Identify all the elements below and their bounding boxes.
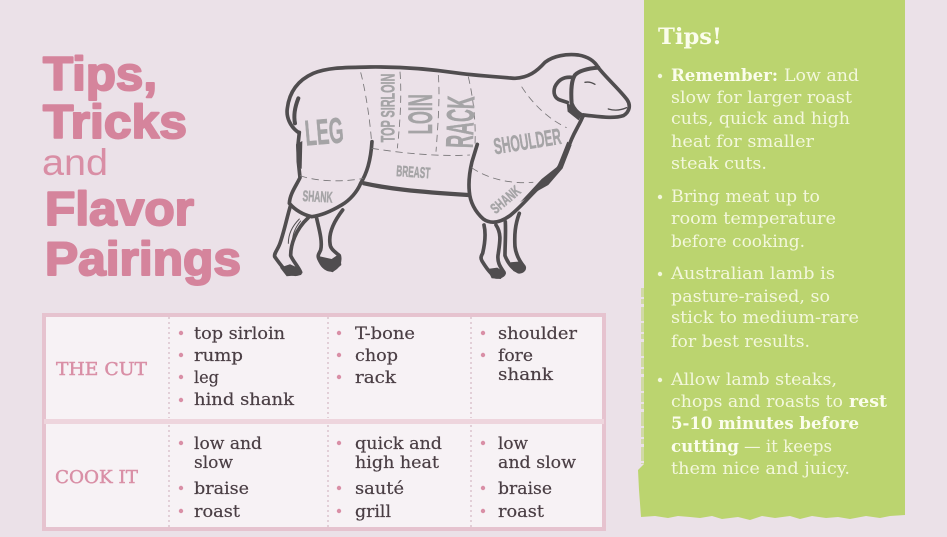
row: the cut: rack (355, 368, 397, 387)
cut divider lines (300, 72, 567, 183)
cut labels: SHOULDER (492, 123, 563, 159)
title (42, 47, 241, 285)
row: the cut: THE CUT (56, 359, 147, 380)
tip: remember: slow for larger roast (671, 88, 852, 107)
cut labels: BREAST (396, 163, 431, 182)
row: the cut (56, 324, 577, 409)
tip: pasture-raised: stick to medium-rare (671, 308, 859, 327)
sheep outline (275, 55, 629, 277)
tip: room temperature: before cooking. (671, 232, 805, 251)
row: cook it: and slow (498, 453, 576, 472)
tip: pasture-raised: for best results. (671, 332, 810, 351)
tip: pasture-raised: pasture-raised, so (671, 287, 830, 306)
sheep diagram (275, 55, 629, 279)
ragged left edge (641, 288, 644, 464)
title: Tricks (43, 95, 187, 148)
row: cook it: braise (498, 479, 552, 498)
row: cook it: quick and (355, 434, 442, 453)
tip: resting: them nice and juicy. (671, 459, 850, 478)
tip: remember: heat for smaller (671, 132, 814, 151)
green panel background (638, 0, 905, 520)
tip: room temperature: room temperature (671, 209, 836, 228)
row: the cut: hind shank (194, 390, 295, 409)
row: the cut: T-bone (355, 324, 415, 343)
row: cook it: COOK IT (55, 467, 138, 488)
row: the cut: chop (355, 346, 398, 365)
row: cook it: slow (194, 453, 233, 472)
tip: room temperature (658, 187, 836, 251)
row: cook it: sauté (355, 479, 404, 498)
tip: room temperature: Bring meat up to (671, 187, 820, 206)
dark shadow shapes (280, 102, 583, 279)
cut labels: SHANK (488, 183, 524, 217)
table (44, 315, 604, 529)
panel: tips (638, 0, 905, 520)
tip: resting: — it keeps (744, 437, 832, 456)
title: Flavor (45, 182, 194, 235)
cut labels: LOIN (402, 94, 440, 134)
row: the cut: top sirloin (194, 324, 285, 343)
tip: resting: cutting (671, 437, 739, 456)
row: cook it: roast (498, 502, 544, 521)
row: the cut: shank (498, 365, 554, 384)
row: cook it: low and (194, 434, 262, 453)
row: the cut: leg (194, 368, 219, 387)
title: Pairings (45, 232, 241, 285)
cut labels (302, 74, 563, 217)
row: the cut: rump (194, 346, 243, 365)
tip: pasture-raised (658, 264, 859, 351)
tip: remember: cuts, quick and high (671, 109, 850, 128)
tip: remember: Low and (784, 66, 859, 85)
row: the cut: shoulder (498, 324, 577, 343)
row: cook it: braise (194, 479, 249, 498)
row: cook it: high heat (355, 453, 439, 472)
tip: resting: Allow lamb steaks, (670, 370, 837, 389)
tip: resting: 5-10 minutes before (671, 414, 859, 433)
cut labels: SHANK (302, 188, 333, 207)
row: the cut: fore (498, 346, 533, 365)
title: Tips, (43, 47, 157, 100)
tip: remember: steak cuts. (671, 154, 767, 173)
row: cook it: roast (194, 502, 240, 521)
tip: remember (658, 66, 859, 173)
cut labels: LEG (303, 109, 345, 154)
tip: remember: Remember: (671, 66, 778, 85)
cut labels: RACK (439, 95, 483, 149)
tip: resting (658, 370, 887, 478)
tip: resting: chops and roasts to (671, 392, 843, 411)
row: cook it (55, 434, 576, 521)
tip: pasture-raised: Australian lamb is (670, 264, 835, 283)
cut labels: TOP SIRLOIN (379, 74, 400, 142)
row: cook it: grill (355, 502, 391, 521)
tip: resting: rest (849, 392, 887, 411)
row: cook it: low (498, 434, 528, 453)
heading: tips: Tips! (658, 24, 722, 50)
title: and (42, 142, 108, 183)
